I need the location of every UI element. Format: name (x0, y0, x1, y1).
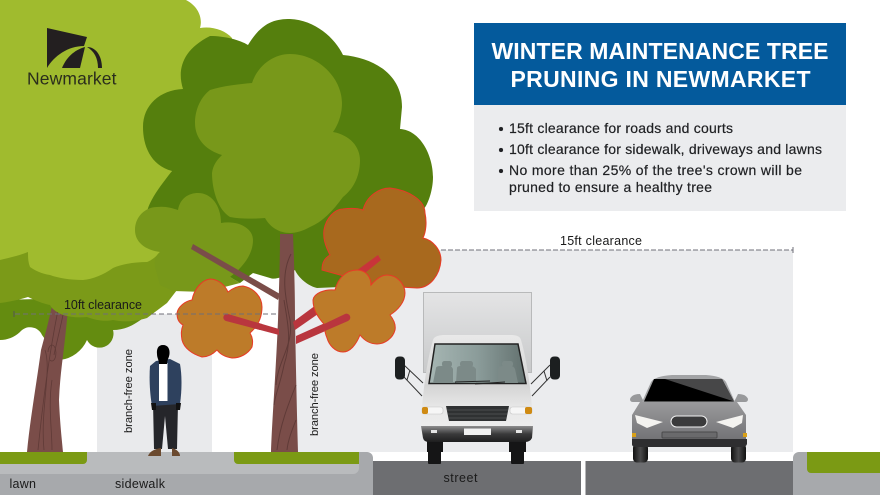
car (630, 375, 748, 462)
head (157, 345, 170, 364)
left tree mid canopy (0, 190, 205, 321)
truck seats (433, 361, 518, 383)
branch-free zone: road clearance (295, 250, 793, 452)
bullet panel (474, 105, 846, 211)
truck grille (446, 406, 509, 421)
15ft clearance label: 15ft clearance (560, 234, 642, 248)
logo wordmark: Newmarket (27, 68, 117, 88)
title: PRUNING IN NEWMARKET (510, 66, 810, 92)
10ft clearance dashed line (15, 313, 278, 315)
legs (153, 402, 178, 449)
lawn strip right (234, 452, 359, 464)
pruned branch stubs over clusters (223, 314, 350, 331)
branch-free zone label left: branch-free zone (123, 349, 135, 433)
car lower grille (662, 432, 717, 438)
left tree light canopy (0, 0, 240, 280)
main tree trunk (271, 234, 298, 452)
10ft tick (13, 311, 15, 317)
person (148, 345, 182, 456)
ground: left lawn and sidewalk (0, 452, 373, 495)
left tree lower canopy (0, 296, 150, 360)
bullet list: 15ft clearance for roads and courts (509, 120, 733, 136)
15ft clearance dashed line (441, 247, 793, 253)
truck wipers (455, 381, 505, 384)
truck mirror arms (404, 365, 550, 396)
street labels (10, 471, 478, 491)
car amber lights (632, 433, 747, 437)
bullet list: No more than 25% of the tree's crown will be (509, 162, 802, 178)
bullet list: pruned to ensure a healthy tree (509, 179, 712, 195)
pruned branches (223, 305, 350, 344)
truck bumper (421, 426, 533, 442)
label lawn: lawn (10, 477, 36, 491)
title (492, 38, 828, 92)
car body (632, 402, 746, 445)
car grille (671, 416, 707, 427)
car roof (642, 375, 735, 402)
hands (151, 403, 181, 410)
title panel (474, 23, 846, 105)
bullet list: 10ft clearance for sidewalk, driveways and lawns (509, 141, 822, 157)
healthy branch (191, 244, 280, 300)
pruned cluster: upper right (322, 188, 441, 288)
truck wheels (427, 440, 526, 464)
branch-free zone label right: branch-free zone (309, 353, 321, 436)
branch-free zone: sidewalk (97, 314, 212, 452)
car bumper (632, 439, 747, 447)
car headlights (635, 415, 743, 428)
street (373, 461, 793, 495)
car wheels (633, 444, 746, 462)
logo mark (47, 28, 102, 68)
left tree trunk (27, 306, 68, 452)
main tree dark canopy (143, 19, 433, 288)
main tree lower-left canopy cluster (135, 193, 253, 292)
truck fog lamps (431, 430, 522, 433)
Newmarket logo (27, 28, 117, 88)
bullet list (499, 120, 822, 195)
truck cab (421, 335, 533, 436)
truck plate (464, 428, 491, 435)
truck (395, 292, 560, 464)
car side mirrors (630, 394, 748, 402)
shirt (159, 363, 168, 401)
truck mirrors (395, 356, 560, 380)
lawn strip left (0, 452, 87, 464)
car windshield (644, 379, 734, 402)
pruned cluster: left (177, 279, 262, 358)
10ft clearance label: 10ft clearance (64, 298, 142, 312)
jacket (150, 359, 182, 406)
truck box (424, 292, 532, 372)
label street: street (444, 471, 478, 485)
truck headlights (422, 407, 532, 414)
right curb and lawn (793, 452, 880, 495)
title: WINTER MAINTENANCE TREE (492, 38, 828, 64)
truck windshield (429, 344, 526, 384)
pruned cluster: lower right (313, 270, 405, 352)
shoes (148, 448, 180, 456)
main tree light canopy (195, 54, 360, 233)
pruned branch inside upper cluster (345, 255, 381, 279)
label sidewalk: sidewalk (115, 477, 166, 491)
